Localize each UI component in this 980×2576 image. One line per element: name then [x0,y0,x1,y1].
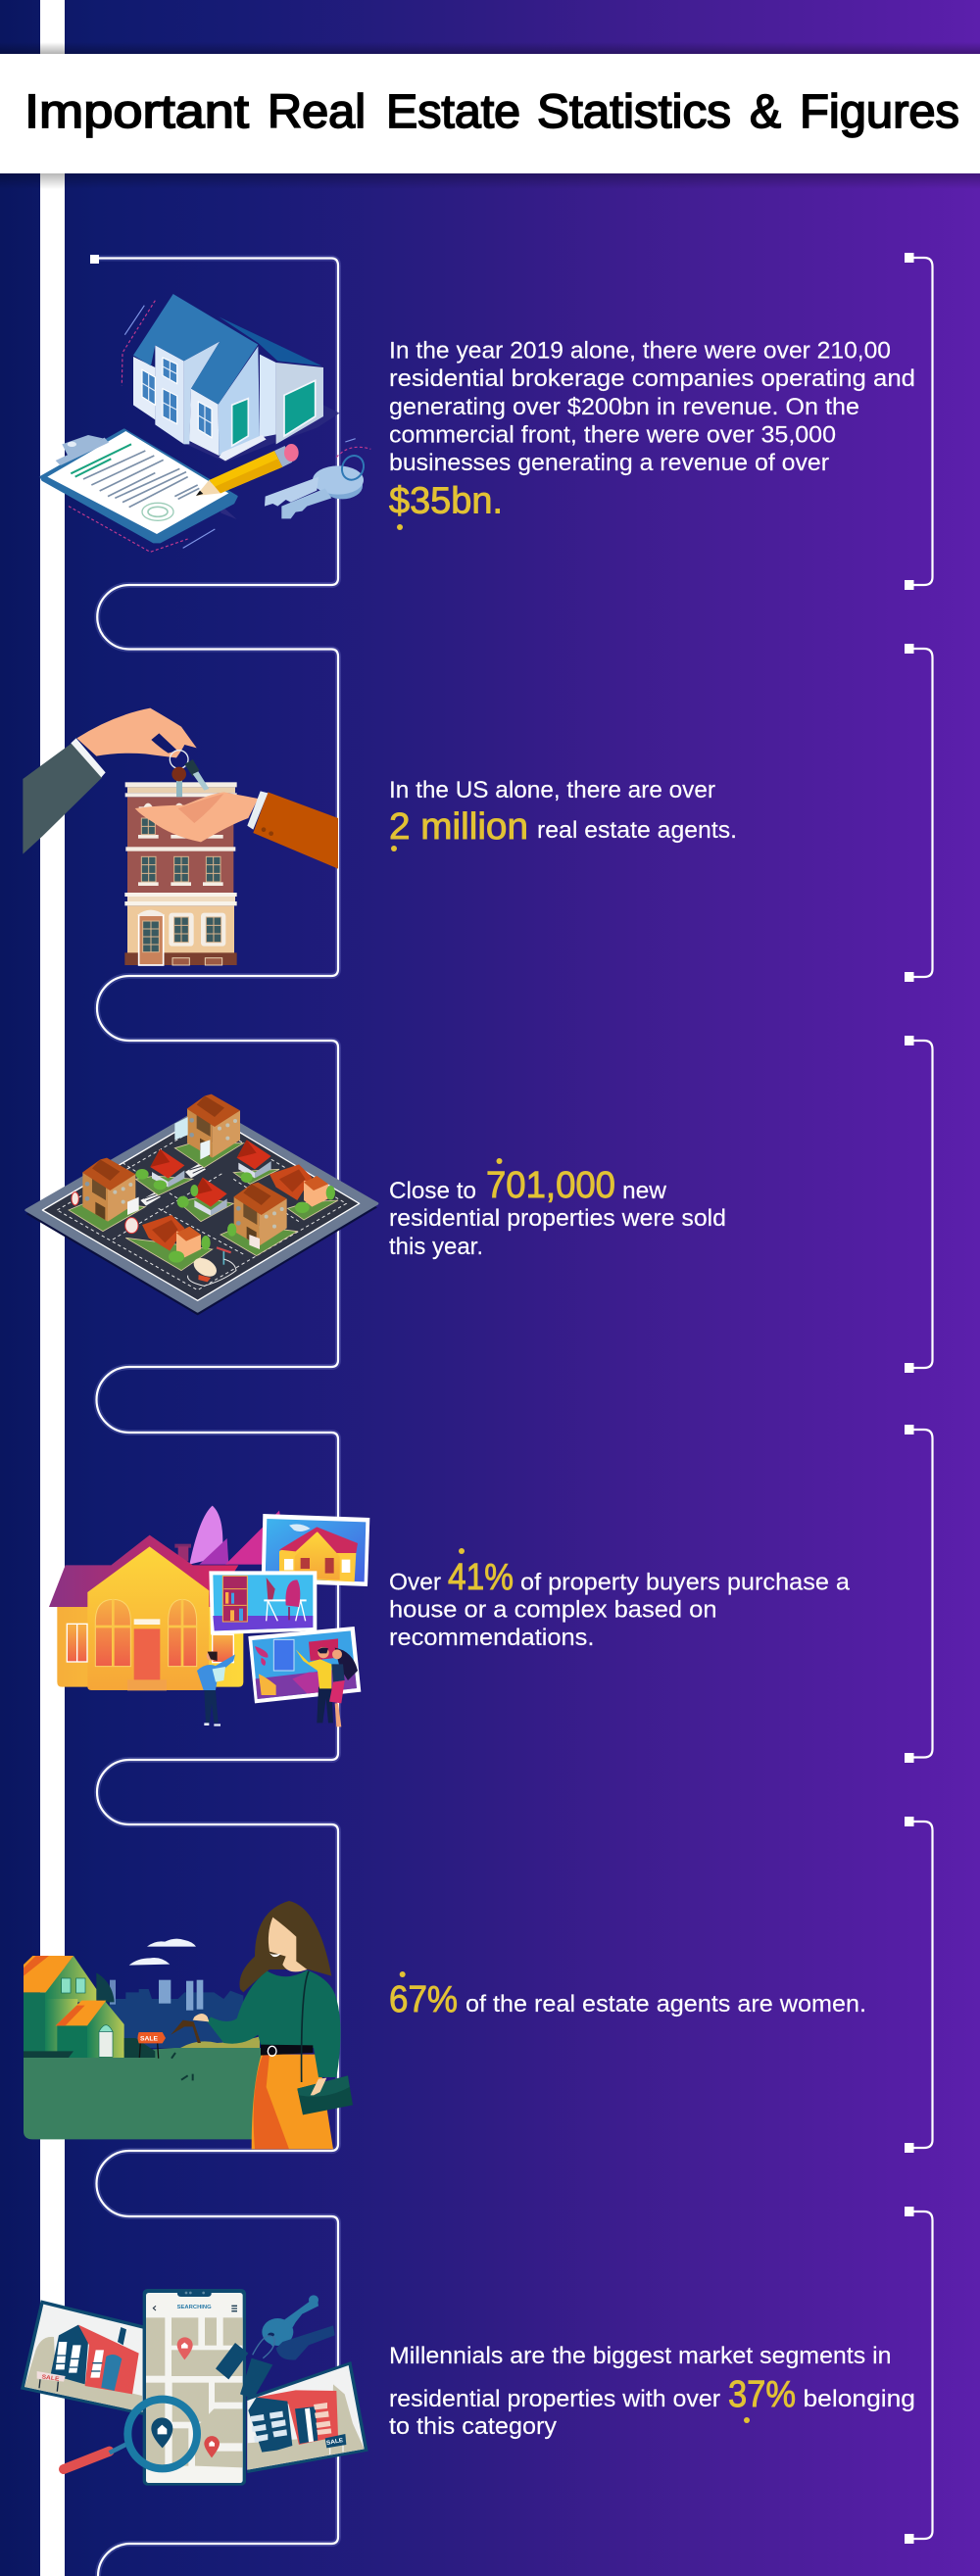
sale sign [137,2032,166,2059]
icon: yellow house with photos and buyers [49,1506,369,1726]
title [24,86,959,138]
stat text 6: 37% [728,2374,796,2415]
stat text 4: recommendations. [389,1625,594,1651]
house [49,1535,243,1690]
stat text 4: of property buyers purchase a [520,1570,851,1595]
title: Estate [386,86,520,138]
man with clipboard [197,1651,235,1726]
stat text 6 [389,2343,915,2440]
building [124,782,237,965]
photo 3 [248,1627,361,1703]
title: Statistics [537,86,731,138]
stat text 1: In the year 2019 alone, there were over 210,00 [389,337,891,365]
right arm and open hand [135,791,338,869]
stat text 1: residential brokerage companies operating and [389,365,915,392]
stat text 5: 67% [389,1979,458,2020]
pencil [196,444,299,496]
stat text 3: Close to [389,1178,476,1204]
stat text 1: businesses generating a revenue of over [389,450,829,476]
woman agent [171,1901,353,2149]
stat text 6: to this category [389,2413,557,2440]
right bracket 2 [905,644,933,982]
icon: house, contract, pencil and keys [41,294,370,552]
icon: agent woman with house for sale [24,1901,353,2149]
photo 1 [262,1514,369,1586]
stat text 1: $35bn. [389,480,503,521]
stat text 6: Millennials are the biggest market segments in [389,2343,892,2369]
right bracket 1 [905,253,933,590]
houses [24,1956,155,2058]
stat text 1 [389,337,915,530]
stat text 5: of the real estate agents are women. [466,1991,866,2017]
stat text 4: 41% [448,1557,514,1598]
icon: hands exchanging keys over brick building [23,708,338,965]
trees and signs [72,1117,335,1286]
sale sign: SALE [140,2035,158,2042]
green lots [69,1143,338,1271]
title: Important [24,86,249,138]
title: Figures [800,86,959,138]
lawn [24,2036,263,2139]
photo 2 [209,1571,317,1634]
keys [170,751,209,797]
keys [265,452,368,518]
icon: isometric neighbourhood [26,1094,377,1315]
left house photo [21,2300,144,2415]
title banner [0,54,980,173]
right bracket 6 [905,2207,933,2544]
stat text 3: new [622,1178,667,1204]
title: & [750,86,781,138]
stat text 5 [389,1971,866,2020]
stat text 6: belonging [804,2386,915,2412]
clipboard [41,429,237,542]
stat text 2: In the US alone, there are over [389,777,715,803]
right house photo [247,2361,368,2473]
skyline and clouds [110,1939,243,2048]
icon: phone map search with houses and keys [21,2289,368,2486]
right bracket 4 [905,1425,933,1763]
stat text 4: Over [389,1570,441,1595]
stat text 6: residential properties with over [389,2386,720,2412]
couple [296,1647,358,1726]
left house photo: SALE [41,2374,60,2383]
road platform [26,1105,377,1315]
keys [216,2295,335,2399]
stat text 2: real estate agents. [537,817,737,844]
right bracket 5 [905,1817,933,2153]
stat text 3: this year. [389,1234,483,1260]
stat text 1: commercial front, there were over 35,000 [389,421,836,449]
phone: SEARCHING [177,2305,212,2310]
stat text 4: house or a complex based on [389,1597,717,1623]
phone [143,2289,246,2486]
stat text 2: 2 million [389,806,528,848]
stat text 3 [389,1158,726,1260]
stat text 3: residential properties were sold [389,1205,726,1232]
stat text 1: generating over $200bn in revenue. On the [389,394,859,420]
stat text 2 [389,777,737,851]
houses [82,1094,328,1257]
title: Real [268,86,366,138]
background leaves and hill [174,1506,287,1565]
map pins [177,2337,220,2457]
magnifying glass [64,2400,197,2469]
stat text 3: 701,000 [486,1165,615,1206]
right house photo: SALE [326,2438,344,2447]
timeline connector line [90,255,338,2576]
left arm and hand holding key [23,708,197,854]
right bracket 3 [905,1036,933,1373]
stat text 4 [389,1548,851,1651]
